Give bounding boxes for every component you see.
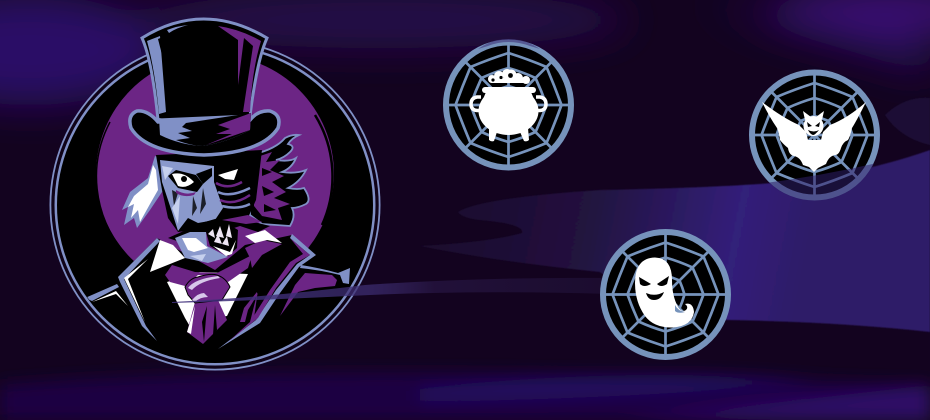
mouth [206,224,238,256]
jacket [87,234,350,349]
bat [762,102,866,172]
cauldron [478,69,538,141]
tie [187,300,227,344]
ghost face [639,276,685,313]
hat band [159,113,251,146]
shirt [167,272,248,330]
moustache [168,214,270,242]
cravat knot [185,274,230,303]
wrinkles [216,182,250,208]
smoke band [420,150,930,332]
cravat wings [165,255,252,286]
cauldron bubbles [491,73,513,82]
top hat [130,19,279,155]
face [156,150,270,263]
icon: cauldron web [446,38,571,168]
emblem: top hat villain [50,19,380,370]
left collar [150,240,185,272]
cauldron handles [471,97,546,110]
emblem outer rings [50,40,380,370]
smoke over bat [769,164,874,200]
icon: bat web [749,70,880,200]
right eye [218,169,238,180]
icon: ghost web [603,232,728,357]
white hair [122,156,166,228]
hat brim [130,111,279,155]
wispy smoke line [172,278,610,303]
purple backdrop disc [96,55,334,293]
hat crown [142,19,267,120]
bat face [807,122,820,135]
purple right hair [250,135,309,226]
ghost [635,258,694,328]
right collar [245,230,282,243]
crown highlights [147,25,261,114]
jaw [175,232,228,263]
